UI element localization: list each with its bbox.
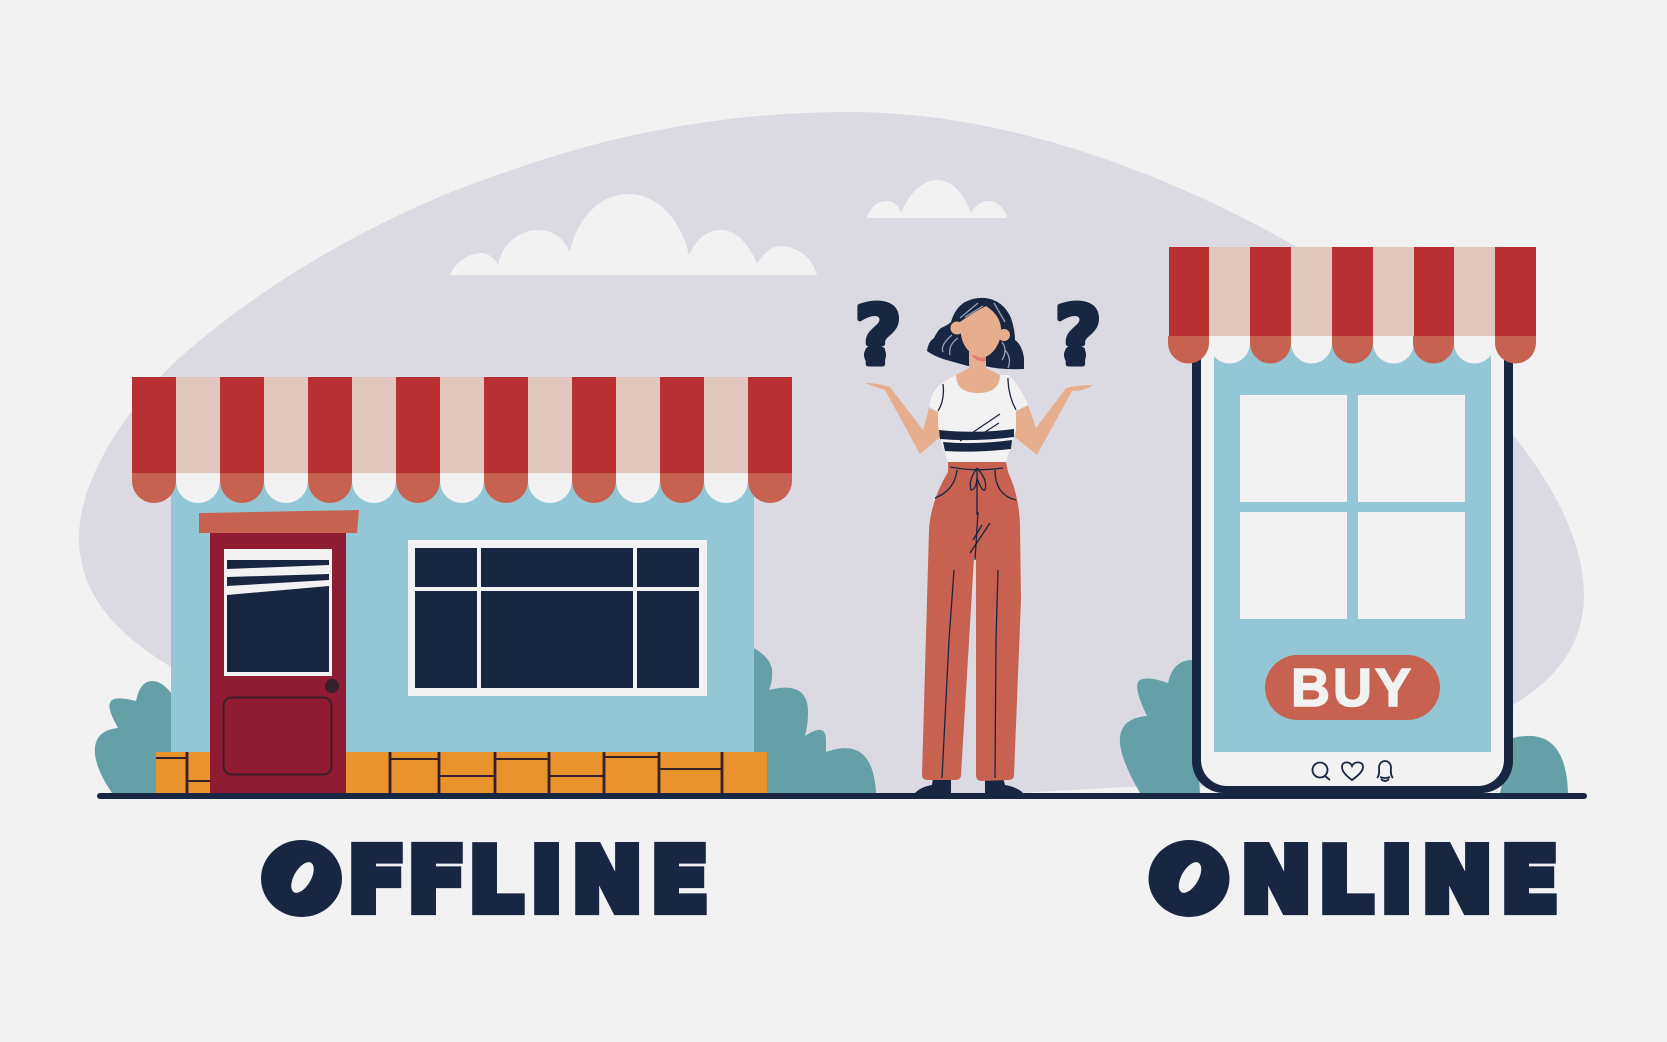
bush: store left	[95, 681, 171, 793]
buy button	[1265, 655, 1440, 720]
buy button: BUY	[1291, 658, 1411, 718]
woman figure	[854, 289, 1102, 793]
bush: phone left	[1120, 660, 1200, 793]
icon: search	[1312, 762, 1330, 780]
phone body	[1192, 330, 1513, 793]
shop wall	[171, 470, 754, 752]
background blob	[79, 112, 1584, 793]
question mark right: ?	[1054, 289, 1102, 384]
question mark left: ?	[854, 289, 902, 384]
icon: bell	[1377, 761, 1393, 781]
ears	[950, 322, 1010, 341]
label: online: ONLINE	[1153, 830, 1558, 932]
small cloud	[867, 180, 1007, 218]
face	[960, 306, 1001, 358]
trouser lines	[935, 467, 1016, 778]
product tiles	[1240, 395, 1465, 619]
large cloud	[450, 194, 817, 275]
right arm	[1015, 385, 1093, 455]
phone screen	[1214, 340, 1491, 752]
label: offline: OFFLINE	[265, 830, 708, 932]
offline store	[95, 377, 876, 793]
awning	[132, 377, 792, 503]
awning	[1168, 247, 1536, 364]
door lintel	[199, 510, 359, 533]
online phone store	[1120, 247, 1568, 793]
left arm	[865, 383, 940, 454]
hair highlights	[942, 303, 1009, 368]
icon: heart	[1342, 762, 1363, 780]
ground line	[97, 793, 1587, 799]
bush: store right	[754, 648, 876, 793]
door	[210, 533, 346, 793]
phone screen bezel	[1201, 320, 1504, 786]
trousers	[922, 460, 1021, 781]
shirt	[929, 375, 1028, 462]
shop window	[408, 540, 707, 696]
neck shadow	[971, 355, 986, 361]
shoes	[915, 778, 1023, 793]
brick steps	[156, 752, 767, 793]
bush: phone right	[1500, 736, 1568, 793]
neck and chest	[956, 350, 1000, 393]
hair	[927, 298, 1024, 369]
